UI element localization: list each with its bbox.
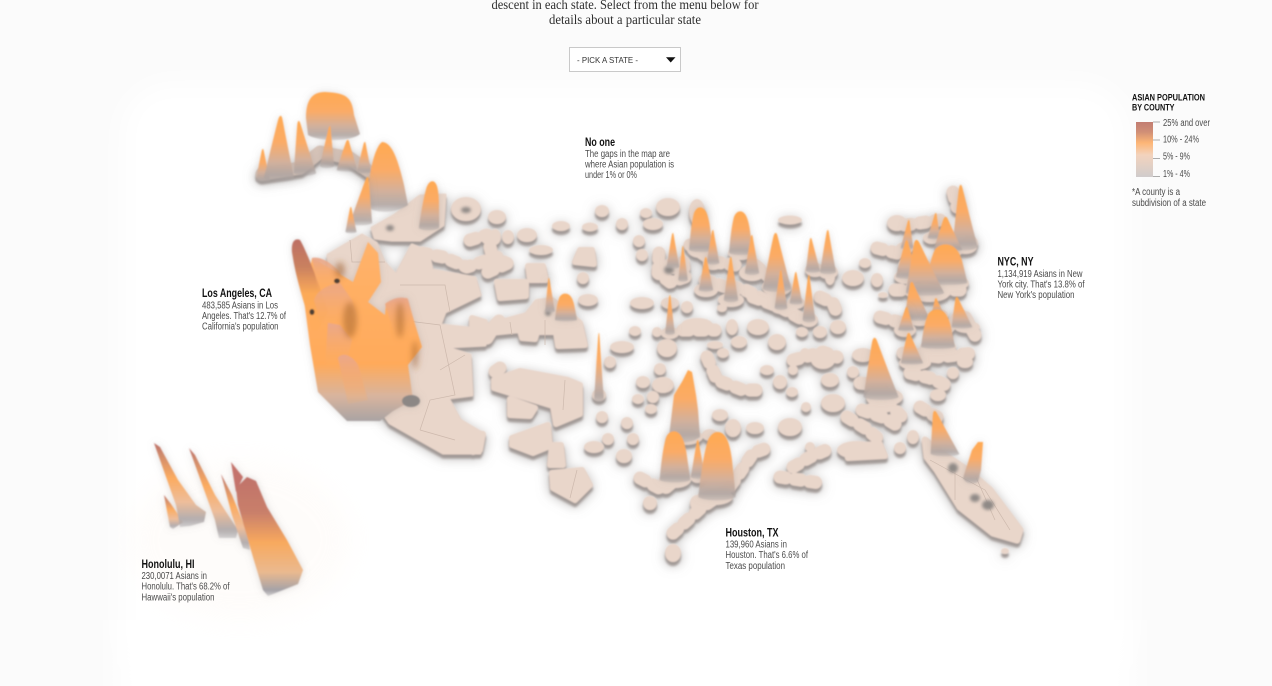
Upper Midwest peaks xyxy=(667,207,836,322)
Alaska base xyxy=(262,152,370,174)
annotation: No one: where Asian population is xyxy=(584,160,674,170)
Northwest peaks xyxy=(345,177,443,233)
pale ridge tops xyxy=(314,283,362,332)
island spike one xyxy=(154,443,206,527)
Oahu main peak xyxy=(236,477,303,596)
island spike two xyxy=(189,448,238,538)
annotation: Honolulu: 230,0071 Asians in xyxy=(142,571,207,582)
red tipped spike xyxy=(292,239,328,330)
legend labels: 5% - 9% xyxy=(1163,152,1190,162)
Western flat mass xyxy=(328,195,487,453)
holes and county lines in flat map xyxy=(350,207,1010,530)
Hawaii peaks xyxy=(154,443,303,596)
legend footnote xyxy=(1132,187,1206,209)
legend xyxy=(1132,92,1211,209)
annotation: No one xyxy=(584,135,674,181)
annotation: Houston: 139,960 Asians in xyxy=(726,540,787,550)
annotation: Houston: Houston, TX xyxy=(726,526,778,540)
dark shading xyxy=(335,262,418,369)
county bases under peaks xyxy=(553,232,980,505)
Mid-Atlantic and Southeast peaks xyxy=(857,297,973,400)
chains of counties xyxy=(422,192,975,533)
annotation: NYC xyxy=(998,254,1085,301)
annotation: Los Angeles: Los Angeles, CA xyxy=(202,286,272,300)
annotation: No one: No one xyxy=(585,135,615,149)
island spike three xyxy=(221,474,250,550)
annotation: No one: under 1% or 0% xyxy=(585,170,637,181)
Alaska peaks xyxy=(256,92,408,212)
central flat county groups xyxy=(472,250,885,500)
small island spike xyxy=(164,495,183,529)
annotation: Los Angeles: 483,585 Asians in Los xyxy=(202,300,278,312)
annotation: NYC: York city. That's 13.8% of xyxy=(998,280,1085,290)
annotation: Honolulu: Honolulu. That's 68.2% of xyxy=(142,582,230,592)
Los Angeles / California peak mass xyxy=(292,239,422,421)
intro text: details about a particular state xyxy=(549,13,701,28)
legend labels: 10% - 24% xyxy=(1163,134,1199,146)
annotation: NYC: 1,134,919 Asians in New xyxy=(998,269,1083,280)
Florida peaks xyxy=(921,411,983,484)
Northeast peaks xyxy=(896,185,978,321)
legend title: ASIAN POPULATION xyxy=(1132,92,1205,104)
Texas and Gulf peaks xyxy=(660,370,738,500)
annotation: Los Angeles xyxy=(202,286,286,332)
annotation: NYC: New York's population xyxy=(998,290,1074,301)
island spike four behind main peak xyxy=(231,462,243,492)
rounded isolated counties xyxy=(451,197,1009,562)
Central peaks xyxy=(544,278,675,402)
annotation: No one: The gaps in the map are xyxy=(585,149,670,160)
annotation: Honolulu: Hawwaii's population xyxy=(142,592,214,604)
legend labels: 1% - 4% xyxy=(1163,169,1190,180)
warm glow behind Hawaii xyxy=(130,460,350,620)
annotation: Los Angeles: California's population xyxy=(202,322,278,332)
state dropdown xyxy=(570,48,680,72)
map: flat extruded county blobs xyxy=(262,152,1020,562)
legend colour ramp xyxy=(1136,122,1153,177)
annotation: Honolulu xyxy=(142,557,230,604)
annotation: Honolulu: Honolulu, HI xyxy=(142,557,194,571)
annotation: Los Angeles: Angeles. That's 12.7% of xyxy=(202,311,286,322)
legend labels xyxy=(1163,118,1211,180)
Florida peninsula xyxy=(925,440,1020,540)
state dropdown: - PICK A STATE - xyxy=(577,56,638,65)
annotation: Houston: Houston. That's 6.6% of xyxy=(726,550,808,561)
intro text xyxy=(492,0,759,28)
backing mass of orange xyxy=(304,242,422,421)
legend title xyxy=(1132,92,1205,114)
legend footnote: subdivision of a state xyxy=(1132,198,1206,209)
legend labels: 25% and over xyxy=(1163,118,1211,129)
legend footnote: *A county is a xyxy=(1132,187,1180,198)
annotation: NYC: NYC, NY xyxy=(998,254,1034,268)
annotation: Houston xyxy=(726,526,808,572)
legend title: BY COUNTY xyxy=(1132,102,1175,114)
page background panel xyxy=(98,84,1152,686)
annotation: Houston: Texas population xyxy=(726,561,785,572)
